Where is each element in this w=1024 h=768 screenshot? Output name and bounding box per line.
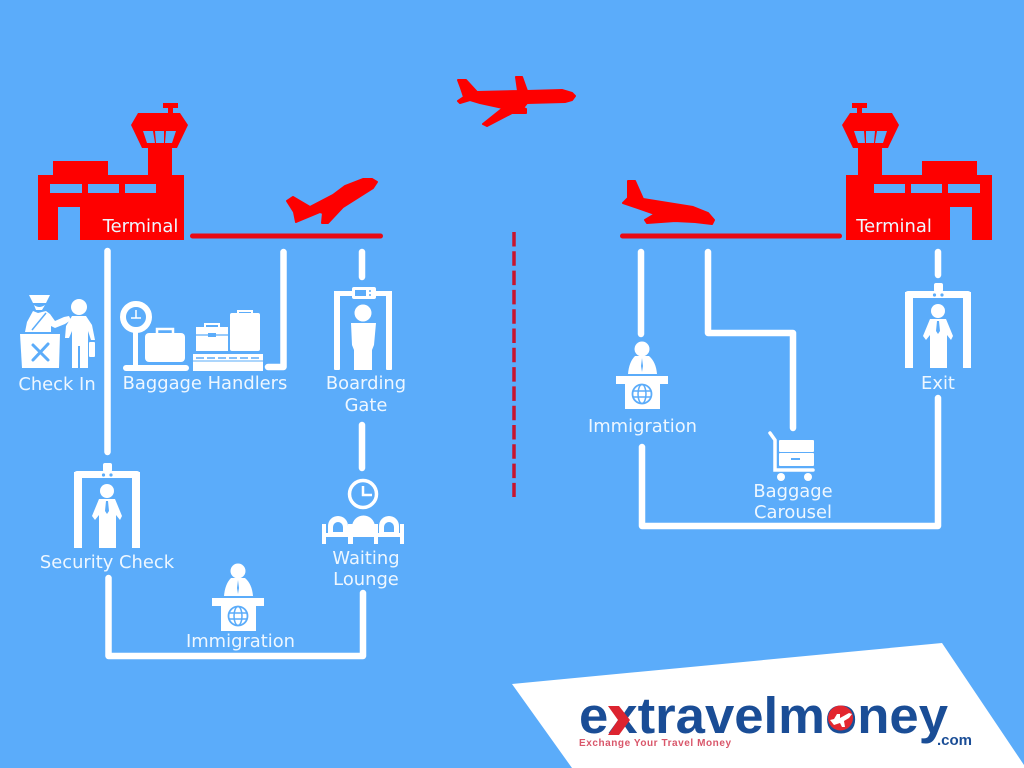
white banner: [512, 643, 1024, 768]
runway left: [190, 234, 383, 238]
label: waiting lounge: Waiting: [332, 548, 400, 569]
icon: immigration officer departure: [212, 564, 264, 631]
label: exit: Exit: [921, 373, 955, 394]
departure terminal: [38, 103, 188, 240]
tagline: Exchange Your Travel Money: [579, 738, 731, 749]
label: boarding gate: Boarding: [326, 373, 406, 394]
label: baggage carousel: Carousel: [754, 502, 832, 523]
label: terminal right: Terminal: [855, 216, 932, 237]
label: boarding gate: [326, 373, 406, 416]
icon: security check gate: [74, 463, 140, 548]
runway right: [620, 234, 842, 238]
label: check in: Check In: [18, 374, 96, 395]
icon: exit gate: [905, 283, 971, 368]
icon: terminal building left: [38, 103, 188, 240]
icon: plane landing: [623, 181, 714, 224]
domain suffix: .com: [937, 732, 972, 749]
label: terminal left: Terminal: [102, 216, 178, 237]
label: immigration arrival: Immigration: [588, 416, 697, 437]
icon: logo x chevron: [608, 706, 630, 735]
divider dashed line: [512, 232, 516, 497]
icon: waiting lounge: [322, 480, 404, 544]
label: security check: Security Check: [40, 552, 175, 573]
logo panel: [512, 643, 1024, 768]
departure flow lines: [108, 251, 363, 656]
label: baggage carousel: [753, 481, 833, 523]
label: waiting lounge: [332, 548, 400, 590]
label: waiting lounge: Lounge: [333, 569, 399, 590]
wordmark: extravelmoney: [579, 687, 949, 744]
icon: check in: [20, 295, 95, 368]
arrival terminal: [842, 103, 992, 240]
label: baggage handlers: Baggage Handlers: [123, 373, 287, 394]
icon: boarding gate: [334, 287, 392, 370]
icon: baggage scale: [123, 304, 189, 371]
icon: baggage cart: [770, 433, 814, 481]
label: baggage carousel: Baggage: [753, 481, 833, 502]
label: immigration departure: Immigration: [186, 631, 295, 652]
icon: plane taking off: [287, 179, 377, 223]
icon: logo plane in o: [828, 706, 853, 730]
arrival flow lines: [641, 252, 938, 526]
icon: plane in flight: [458, 77, 575, 126]
icon: immigration officer arrival: [616, 342, 668, 409]
icon: baggage carousel with bags: [193, 311, 263, 371]
label: boarding gate: Gate: [345, 395, 387, 416]
icon: terminal building right: [842, 103, 992, 240]
